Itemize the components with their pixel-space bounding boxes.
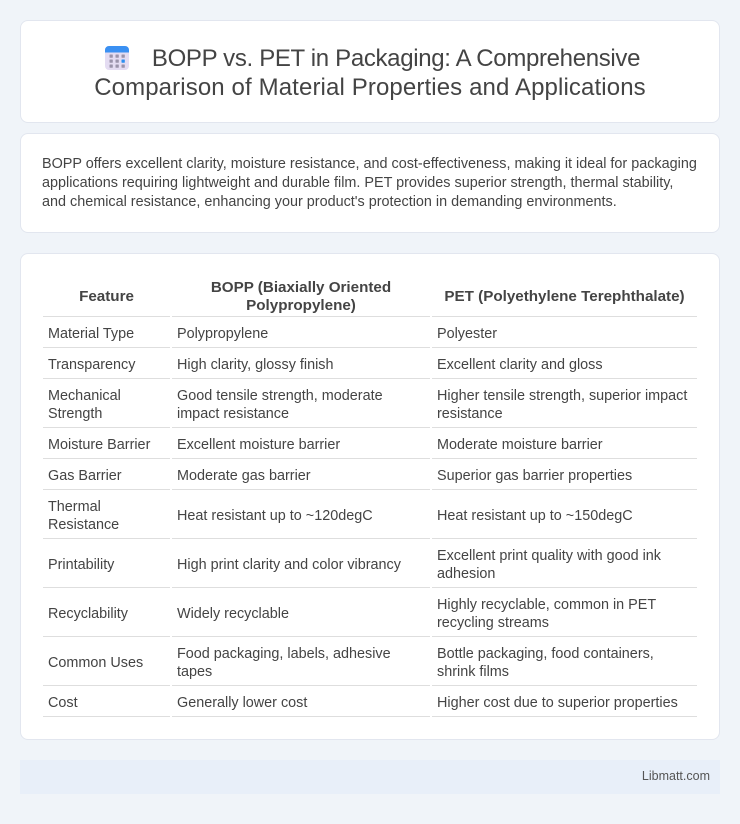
comparison table: Excellent print quality with good ink adhesion (437, 548, 661, 582)
comparison table: Food packaging, labels, adhesive tapes (177, 646, 391, 680)
footer source text: Libmatt.com (642, 769, 710, 783)
title: Comparison of Material Properties and Applications (94, 74, 646, 101)
comparison table: Higher tensile strength, superior impact resistance (437, 388, 687, 422)
title card (20, 20, 720, 123)
intro card (20, 133, 720, 233)
comparison table: BOPP (Biaxially Oriented Polypropylene) (211, 278, 391, 314)
comparison table: Heat resistant up to ~150degC (437, 508, 633, 524)
comparison table: Mechanical Strength (48, 388, 121, 422)
comparison table: Moderate gas barrier (177, 468, 311, 484)
comparison table: Bottle packaging, food containers, shrink films (437, 646, 654, 680)
comparison table: Gas Barrier (48, 468, 122, 484)
intro text: BOPP offers excellent clarity, moisture resistance, and cost-effectiveness, making it ideal for packaging applications requiring lightweight and durable film. PET provides superior strength, thermal stability, and chemical resistance, enhancing your product's protection in demanding environments. (42, 156, 697, 210)
comparison table: PET (Polyethylene Terephthalate) (444, 288, 685, 304)
comparison table: Widely recyclable (177, 606, 289, 622)
comparison table: Printability (48, 556, 114, 572)
comparison table: Excellent clarity and gloss (437, 356, 603, 372)
comparison table (43, 278, 697, 717)
comparison table: Higher cost due to superior properties (437, 694, 678, 710)
comparison table: Transparency (48, 356, 135, 372)
comparison table: Good tensile strength, moderate impact resistance (177, 388, 383, 422)
comparison table: Polypropylene (177, 326, 268, 342)
comparison table: Material Type (48, 326, 134, 342)
comparison table: Superior gas barrier properties (437, 468, 632, 484)
comparison table: Moderate moisture barrier (437, 436, 603, 452)
comparison table: Generally lower cost (177, 694, 307, 710)
footer bar (20, 760, 720, 794)
comparison table: Cost (48, 694, 78, 710)
comparison table: High print clarity and color vibrancy (177, 556, 401, 572)
comparison table: Heat resistant up to ~120degC (177, 508, 373, 524)
comparison table: High clarity, glossy finish (177, 356, 333, 372)
comparison table card (20, 253, 720, 740)
title: BOPP vs. PET in Packaging: A Comprehensive (152, 45, 640, 72)
title (94, 45, 646, 101)
comparison table: Highly recyclable, common in PET recycling streams (437, 596, 656, 630)
comparison table: Thermal Resistance (48, 498, 119, 532)
comparison table: Common Uses (48, 654, 143, 670)
comparison table: Moisture Barrier (48, 436, 150, 452)
comparison table: Excellent moisture barrier (177, 436, 340, 452)
comparison table: Recyclability (48, 606, 128, 622)
comparison table: Feature (79, 288, 134, 304)
icon: calendar (105, 46, 129, 70)
comparison table: Polyester (437, 326, 497, 342)
